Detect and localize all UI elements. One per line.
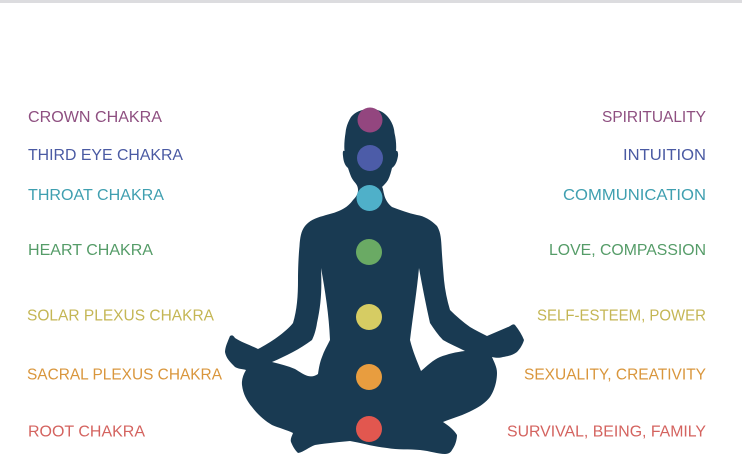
label: love, compassion: LOVE, COMPASSION — [549, 242, 706, 259]
right labels: meanings — [507, 109, 706, 440]
label: sexuality, creativity: SEXUALITY, CREATIVITY — [524, 366, 706, 384]
sacral dot — [356, 364, 382, 390]
label: self-esteem, power: SELF-ESTEEM, POWER — [537, 308, 706, 324]
meditating figure silhouette — [225, 109, 524, 454]
label: throat chakra: THROAT CHAKRA — [28, 187, 164, 204]
root dot — [356, 416, 382, 442]
chakra dots — [356, 108, 383, 442]
label: solar plexus chakra: SOLAR PLEXUS CHAKRA — [27, 308, 214, 324]
label: survival, being, family: SURVIVAL, BEING, FAMILY — [507, 424, 706, 440]
label: communication: COMMUNICATION — [563, 187, 706, 204]
label: sacral plexus chakra: SACRAL PLEXUS CHAKRA — [27, 366, 222, 384]
label: crown chakra: CROWN CHAKRA — [28, 109, 162, 126]
third eye dot — [357, 145, 383, 171]
label: intuition: INTUITION — [623, 147, 706, 164]
label: root chakra: ROOT CHAKRA — [28, 424, 145, 440]
solar plexus dot — [356, 304, 382, 330]
label: third eye chakra: THIRD EYE CHAKRA — [28, 147, 183, 164]
crown dot — [358, 108, 382, 132]
left labels: chakra names — [27, 109, 222, 440]
heart dot — [356, 239, 382, 265]
throat dot — [356, 185, 382, 211]
label: spirituality: SPIRITUALITY — [602, 109, 706, 126]
label: heart chakra: HEART CHAKRA — [28, 242, 153, 259]
